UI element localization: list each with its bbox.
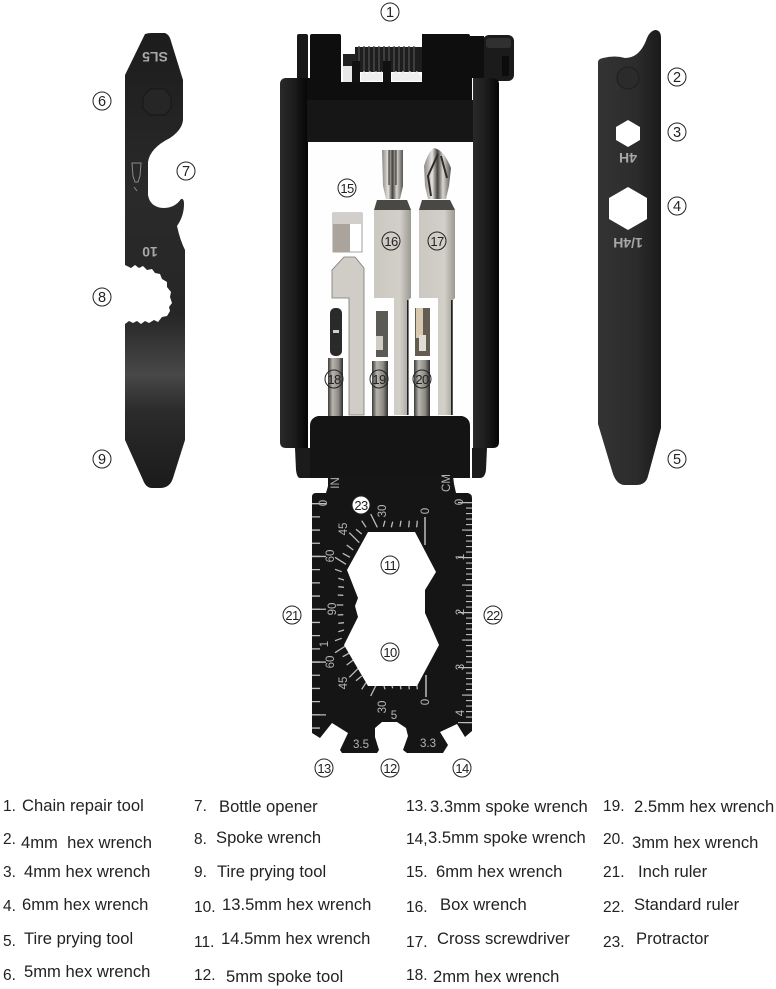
callout 6	[93, 92, 111, 110]
legend item 1: 1.	[3, 798, 16, 815]
legend item 22: Standard ruler	[634, 895, 740, 914]
legend item 16: 16.	[406, 899, 428, 916]
callout 6: 6	[98, 94, 106, 110]
tool: box wrench with torx tip	[367, 150, 411, 415]
ruler labels: 60	[325, 656, 337, 668]
ruler labels: 4	[455, 709, 467, 716]
ruler labels: 30	[377, 505, 389, 517]
callout 3	[668, 123, 686, 141]
callout 2	[668, 68, 686, 86]
callout 4	[668, 197, 686, 215]
legend item 21: 21.	[603, 864, 625, 881]
chain tool: knob	[483, 35, 514, 81]
callout 5: 5	[673, 452, 681, 468]
callout 7: 7	[182, 164, 190, 180]
icon: hex bolt on right tool	[617, 67, 639, 89]
legend item 19: 2.5mm hex wrench	[634, 797, 774, 816]
legend item 2: 2.	[3, 831, 16, 848]
callout 11	[381, 556, 399, 574]
legend item 1: Chain repair tool	[22, 796, 144, 815]
callout 7	[177, 162, 195, 180]
legend item 13: 13.	[406, 798, 428, 815]
icon: hex bolt on left tool	[143, 89, 171, 115]
hinge: right	[472, 448, 487, 478]
callout 10: 10	[383, 645, 397, 660]
ruler labels: 3.5	[353, 739, 369, 751]
ruler labels: 2	[455, 609, 467, 615]
legend item 9: 9.	[194, 864, 207, 881]
legend item 7: 7.	[194, 798, 207, 815]
callout 19: 19	[372, 372, 386, 387]
callout 15: 15	[340, 181, 354, 196]
legend item 6: 6.	[3, 967, 16, 984]
callout 16	[382, 232, 400, 250]
chain tool: block with notch	[307, 34, 484, 142]
tool: cross screwdriver	[413, 148, 455, 415]
legend item 12: 5mm spoke tool	[226, 967, 343, 986]
legend item 16	[406, 895, 527, 916]
panel: central folding tool body	[280, 34, 514, 478]
lower block	[310, 416, 470, 478]
callout 17	[428, 232, 446, 250]
ruler labels: 60	[325, 550, 337, 562]
legend item 13: 3.3mm spoke wrench	[430, 797, 588, 816]
legend item 18: 18.	[406, 967, 428, 984]
window: inner tool bay	[308, 142, 473, 418]
chain tool: left tab	[297, 34, 308, 80]
callout numbers	[93, 3, 686, 777]
legend item 14: 14,	[406, 831, 428, 848]
tool: 2.5mm hex bit	[372, 311, 388, 416]
legend item 19: 19.	[603, 798, 625, 815]
callout 14: 14	[455, 761, 469, 776]
ruler labels: 0	[454, 499, 466, 505]
tool: 3mm hex bit	[414, 308, 430, 416]
tool: 2mm hex bit	[328, 308, 343, 416]
callout 9	[93, 450, 111, 468]
legend item 21: Inch ruler	[638, 862, 708, 881]
legend item 21	[603, 862, 708, 881]
ruler labels: IN	[330, 477, 342, 489]
legend item 9: Tire prying tool	[217, 862, 326, 881]
callout 18: 18	[327, 372, 341, 387]
ruler labels: 3.3	[420, 738, 436, 750]
chain tool: pins and slots	[343, 61, 422, 82]
text: 1/4H engraving: 1/4H	[613, 235, 643, 251]
callout 5	[668, 450, 686, 468]
panel: ruler and protractor card	[312, 474, 472, 753]
ruler labels: 90	[327, 603, 339, 615]
callout 18	[325, 370, 343, 388]
legend item 7: Bottle opener	[219, 797, 318, 816]
callout 19	[370, 370, 388, 388]
legend item 15: 15.	[406, 864, 428, 881]
hinge: left	[295, 448, 310, 478]
callout 1: 1	[386, 5, 394, 21]
legend item 17	[406, 929, 570, 951]
callout 12: 12	[383, 761, 397, 776]
legend item 22: 22.	[603, 899, 625, 916]
legend item 23: Protractor	[636, 929, 709, 948]
text: 4H engraving: 4H	[619, 150, 637, 166]
chain tool: body shading	[307, 100, 473, 142]
callout 13: 13	[317, 761, 331, 776]
legend item 10: 13.5mm hex wrench	[222, 895, 371, 914]
legend item 22	[603, 895, 740, 916]
legend item 2: 4mm hex wrench	[21, 833, 152, 852]
callout 15	[338, 179, 356, 197]
ruler labels: CM	[441, 474, 453, 492]
callout 20	[413, 370, 431, 388]
legend item 5: Tire prying tool	[24, 929, 133, 948]
callout 11: 11	[384, 558, 397, 573]
text: 10 engraving: 10	[142, 244, 158, 260]
legend item 6: 5mm hex wrench	[24, 962, 150, 981]
ruler labels: 5	[391, 710, 397, 722]
callout 3: 3	[673, 125, 681, 141]
legend item 11: 11.	[194, 934, 214, 951]
legend item 17: Cross screwdriver	[437, 929, 570, 948]
legend item 4: 6mm hex wrench	[22, 895, 148, 914]
legend item 11: 14.5mm hex wrench	[221, 929, 370, 948]
callout 22	[484, 606, 502, 624]
callout 23	[352, 496, 370, 514]
callout 22: 22	[486, 608, 500, 623]
ruler labels: 30	[377, 701, 389, 713]
legend item 8: 8.	[194, 831, 207, 848]
callout 9: 9	[98, 452, 106, 468]
side rail: left	[280, 78, 308, 448]
callout 21: 21	[285, 608, 299, 623]
legend item 10: 10.	[194, 899, 216, 916]
legend item 14: 3.5mm spoke wrench	[428, 828, 586, 847]
callout 1	[381, 3, 399, 21]
callout 2: 2	[673, 70, 681, 86]
panel: left tool (spoke wrench, bottle opener, tire lever)	[125, 33, 185, 488]
ruler labels: 0	[420, 508, 432, 514]
legend item 4: 4.	[3, 898, 16, 915]
hole: 14.5mm and 13.5mm hex wrenches	[344, 532, 439, 686]
callout 21	[283, 606, 301, 624]
legend item 18: 2mm hex wrench	[433, 967, 559, 986]
legend item 12: 12.	[194, 967, 216, 984]
callout 17: 17	[430, 234, 444, 249]
callout 8: 8	[98, 290, 106, 306]
callout 10	[381, 643, 399, 661]
icon: bottle engraving	[132, 163, 141, 191]
legend item 20: 20.	[603, 831, 625, 848]
ruler labels: 0	[420, 699, 432, 705]
callout 8	[93, 288, 111, 306]
ruler labels: 1	[319, 641, 331, 647]
legend item 16: Box wrench	[440, 895, 527, 914]
ruler labels: 3	[455, 664, 467, 670]
callout 16: 16	[384, 234, 398, 249]
legend	[3, 796, 774, 986]
legend item 15: 6mm hex wrench	[436, 862, 562, 881]
callout 23: 23	[354, 498, 368, 513]
ruler labels: 45	[338, 677, 350, 689]
panel: right tool (hex wrenches, tire lever)	[598, 30, 661, 485]
legend item 3: 3.	[3, 864, 16, 881]
protractor ticks	[335, 514, 426, 697]
legend item 23: 23.	[603, 934, 625, 951]
ruler labels: 1	[455, 554, 467, 560]
legend item 20: 3mm hex wrench	[632, 833, 758, 852]
ruler ticks: inch scale	[316, 503, 319, 732]
ruler labels: 45	[338, 523, 350, 535]
legend item 23	[603, 929, 709, 951]
callout 20: 20	[415, 372, 429, 387]
hole: 6mm hex	[609, 187, 647, 230]
ruler labels: 0	[318, 500, 330, 506]
legend item 5: 5.	[3, 933, 16, 950]
ruler labels	[318, 474, 467, 751]
legend item 3: 4mm hex wrench	[24, 862, 150, 881]
text: SL5 engraving: SL5	[142, 49, 168, 65]
tool: 6mm hex wrench with socket head	[332, 213, 364, 415]
legend item 17: 17.	[406, 934, 428, 951]
hole: 4mm hex	[616, 120, 640, 147]
side rail: right	[473, 78, 499, 448]
callout 14	[453, 759, 471, 777]
callout 4: 4	[673, 199, 681, 215]
callout 12	[381, 759, 399, 777]
ruler ticks: metric scale	[465, 502, 469, 724]
chain tool: screw thread	[343, 46, 422, 72]
callout 13	[315, 759, 333, 777]
legend item 8: Spoke wrench	[216, 828, 321, 847]
